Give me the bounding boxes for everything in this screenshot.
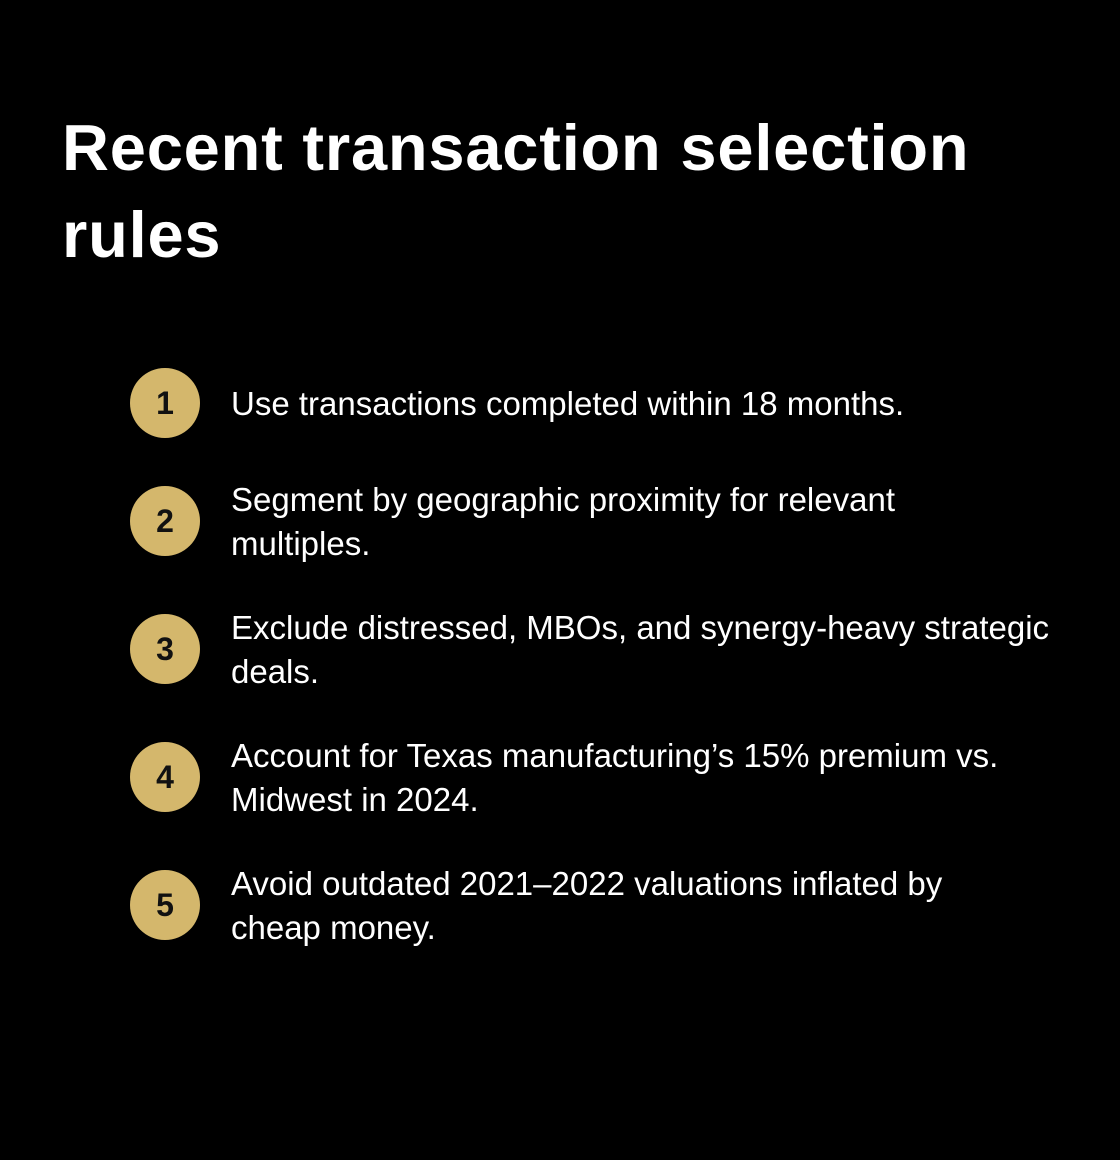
text 3 bbox=[231, 609, 1049, 690]
icon: number 1 bbox=[130, 368, 200, 438]
text 3: deals. bbox=[231, 653, 319, 690]
icon: number 2 bbox=[130, 486, 200, 556]
icon: number 3 bbox=[130, 614, 200, 684]
text 3: Exclude distressed, MBOs, and synergy-heavy strategic bbox=[231, 609, 1049, 646]
text 5: Avoid outdated 2021–2022 valuations inflated by bbox=[231, 865, 942, 902]
item 5 bbox=[130, 865, 942, 946]
text 2: Segment by geographic proximity for relevant bbox=[231, 481, 895, 518]
text 4: Account for Texas manufacturing’s 15% premium vs. bbox=[231, 737, 998, 774]
title: Recent transaction selection bbox=[62, 111, 969, 184]
text 4: Midwest in 2024. bbox=[231, 781, 479, 818]
text 1: Use transactions completed within 18 months. bbox=[231, 385, 904, 422]
icon: number 1: 1 bbox=[156, 385, 174, 421]
text 4 bbox=[231, 737, 998, 818]
icon: number 2: 2 bbox=[156, 503, 174, 539]
text 5 bbox=[231, 865, 942, 946]
icon: number 3: 3 bbox=[156, 631, 174, 667]
icon: number 5 bbox=[130, 870, 200, 940]
text 2 bbox=[231, 481, 895, 562]
item 2 bbox=[130, 481, 895, 562]
title: rules bbox=[62, 198, 221, 271]
icon: number 4: 4 bbox=[156, 759, 174, 795]
item 4 bbox=[130, 737, 998, 818]
item 1 bbox=[130, 368, 904, 438]
title bbox=[62, 111, 969, 271]
icon: number 4 bbox=[130, 742, 200, 812]
text 2: multiples. bbox=[231, 525, 370, 562]
item 3 bbox=[130, 609, 1049, 690]
text 5: cheap money. bbox=[231, 909, 436, 946]
icon: number 5: 5 bbox=[156, 887, 174, 923]
